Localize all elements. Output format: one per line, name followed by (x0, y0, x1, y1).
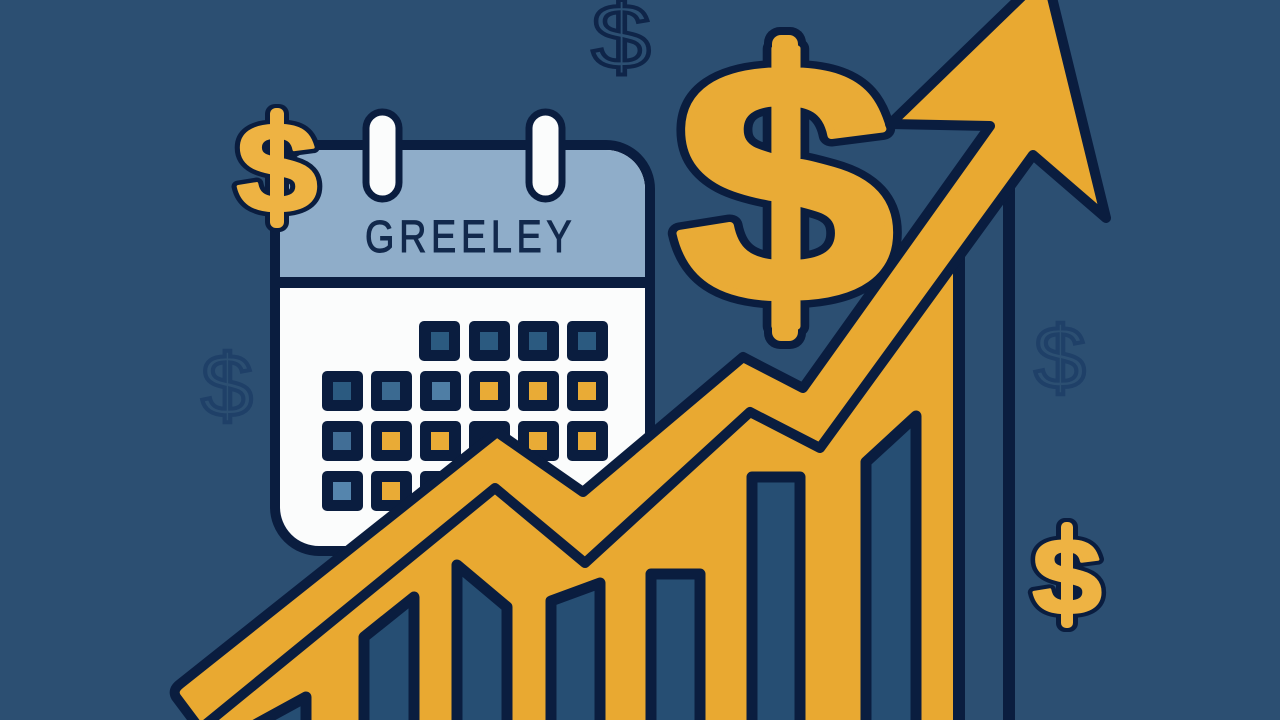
calendar title: GREELEY (365, 211, 572, 262)
icon: large gold dollar: $ (675, 0, 895, 374)
calendar ring left (366, 112, 399, 199)
header divider (275, 277, 650, 288)
calendar header (280, 150, 645, 283)
calendar page (275, 145, 650, 551)
calendar ring right (529, 112, 562, 199)
icon: gold dollar bottom right: $ (1032, 517, 1102, 637)
icon: faint dollar right: $ (1034, 309, 1086, 408)
gold area (205, 260, 960, 720)
panel: calendar (275, 112, 650, 551)
icon: gold dollar on calendar: $ (236, 97, 318, 240)
arrow: rising trend line (175, 0, 1106, 720)
bars (253, 416, 916, 720)
calendar day grid (322, 321, 608, 511)
icon: gold dollar bottom right: $ (1032, 517, 1102, 637)
icon: gold dollar on calendar: $ (236, 97, 318, 240)
tall bar outline (959, 185, 1009, 720)
icon: faint dollar left: $ (201, 337, 253, 436)
chart: gold area with bars (205, 185, 1009, 720)
icon: large gold dollar: $ (675, 0, 895, 374)
